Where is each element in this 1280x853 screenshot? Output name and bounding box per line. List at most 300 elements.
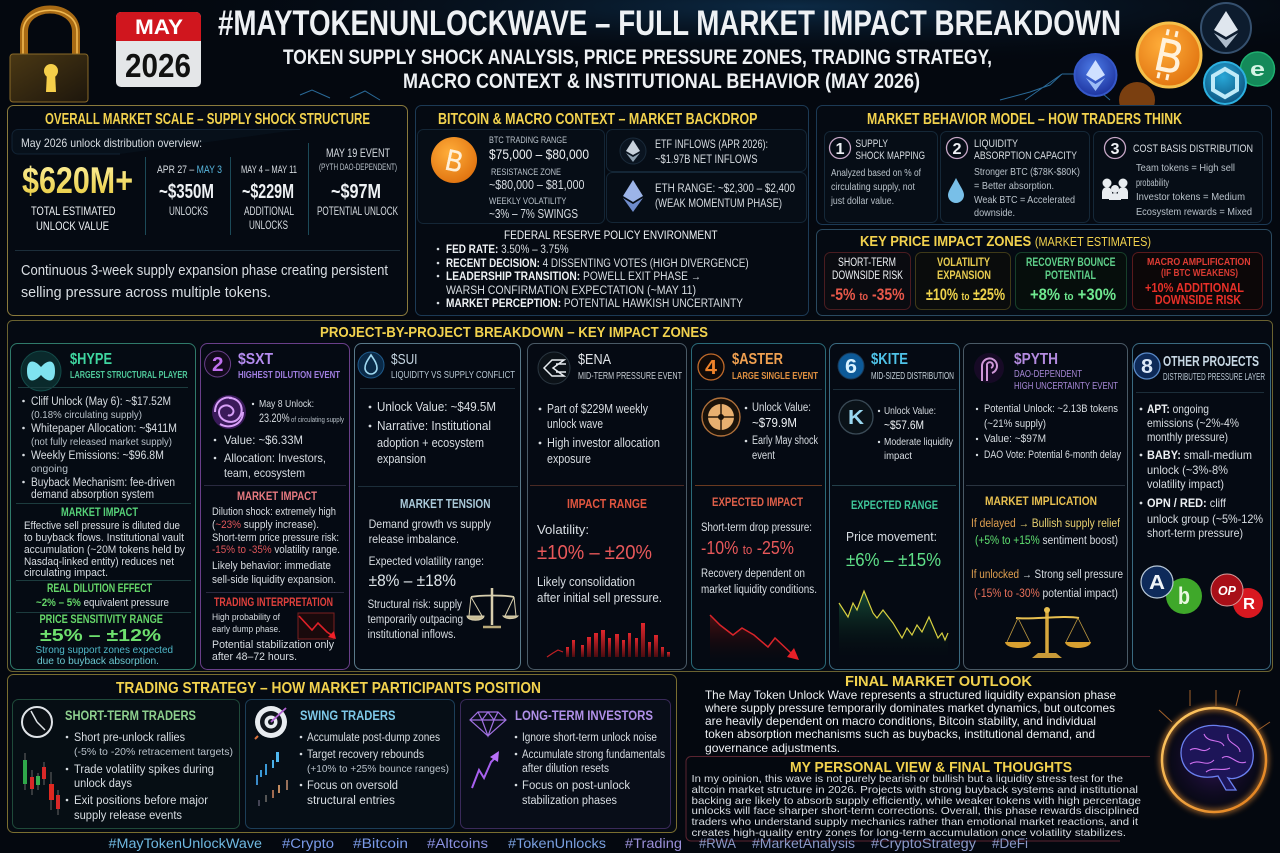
text: ASTER expected impact: EXPECTED IMPACT: [712, 495, 804, 509]
text: federal reserve policy: FEDERAL RESERVE POLICY ENVIRONMENT: [504, 228, 718, 242]
card: liquidity absorption capacity: Stronger BTC ($78K-$80K): [974, 166, 1080, 178]
heading: ENA: $ENA: [578, 351, 611, 368]
text: outlook paragraph: token absorption mechanisms such as buybacks, institutional demand, and: [705, 727, 1095, 741]
card: SUI: [354, 344, 520, 670]
text: SXT market impact: MARKET IMPACT: [237, 489, 318, 503]
text: swing bullet list: (+10% to +25% bounce ranges): [307, 763, 449, 775]
text: short-term bullet list: Trade volatility spikes during: [74, 764, 214, 776]
stat: Apr 27 to May 3: [157, 164, 222, 218]
text: SUI key points: adoption + ecosystem: [377, 435, 484, 450]
card: liquidity absorption capacity: 2: [952, 141, 962, 158]
card: SXT: [200, 344, 350, 670]
hashtags: #RWA: [699, 836, 736, 851]
heading: SXT: $SXT: [238, 351, 273, 368]
text: ASTER key points: event: [752, 450, 776, 462]
text: HYPE key points: Whitepaper Allocation: ~$411M: [31, 423, 177, 435]
zone: macro amplification: MACRO AMPLIFICATION: [1147, 256, 1251, 268]
sub-panel: BTC levels: [418, 130, 604, 224]
text: SXT key points: team, ecosystem: [224, 466, 305, 480]
text: other projects list: BABY: small-medium: [1147, 448, 1252, 462]
text: ASTER key points: [745, 402, 818, 462]
text: SUI market tension: MARKET TENSION: [400, 497, 490, 511]
chart: ENA red volume bars: [547, 623, 670, 657]
text: HYPE key points: Weekly Emissions: ~$96.8M: [31, 450, 164, 462]
card: liquidity absorption capacity: [940, 132, 1090, 222]
text: short-term bullet list: unlock days: [74, 778, 132, 790]
text: ASTER expected impact: -10% to -25%: [701, 538, 794, 558]
card: short-term traders: [12, 700, 240, 828]
zone: short-term downside risk: [824, 252, 910, 310]
heading: my personal view: MY PERSONAL VIEW & FINAL THOUGHTS: [790, 759, 1072, 776]
icon: target: [255, 706, 287, 739]
zone: recovery bounce potential: POTENTIAL: [1045, 270, 1096, 282]
heading: KITE: $KITE: [871, 351, 908, 368]
text: personal view paragraph: creates high-quality entry zones for long-term accumulation once volatility stabilizes.: [692, 827, 1126, 839]
text: PYTH market implication: If delayed → Bullish supply relief: [971, 518, 1121, 530]
text: HYPE key points: (0.18% circulating supply): [31, 409, 142, 421]
card: KITE: [830, 344, 960, 670]
heading: ASTER: LARGE SINGLE EVENT: [732, 370, 818, 382]
text: SXT market impact: sell-side liquidity expansion.: [212, 574, 336, 586]
sub-panel: ETH range: [606, 172, 806, 222]
text: federal reserve policy: WARSH CONFIRMATION EXPECTATION (~MAY 11): [446, 285, 696, 297]
card: supply shock mapping: 1: [836, 141, 845, 158]
text: KITE key points: ~$57.6M: [884, 418, 924, 432]
text: ENA impact range: Likely consolidation: [537, 575, 635, 589]
card: supply shock mapping: just dollar value.: [830, 195, 894, 207]
card: liquidity absorption capacity: LIQUIDITY: [974, 138, 1019, 150]
text: SUI market tension: Demand growth vs supply: [369, 517, 491, 531]
sub-panel: ETH range: ETH RANGE: ~$2,300 – $2,400: [655, 181, 795, 195]
heading: swing traders: SWING TRADERS: [300, 708, 396, 723]
icon: clock: [22, 707, 52, 737]
text: HYPE price sensitivity range: [36, 614, 173, 667]
text: supply expansion summary: selling pressure across multiple tokens.: [21, 285, 271, 301]
text: other projects list: volatility impact): [1147, 477, 1224, 491]
text: HYPE market impact: Effective sell pressure is diluted due: [24, 520, 180, 532]
stat: May 4 to May 11: UNLOCKS: [249, 220, 288, 232]
hashtags: #CryptoStrategy: [871, 836, 976, 851]
text: supply expansion summary: [21, 263, 388, 301]
icon: number 4: 4: [705, 357, 718, 379]
subtitle: TOKEN SUPPLY SHOCK ANALYSIS, PRICE PRESSURE ZONES, TRADING STRATEGY,: [283, 46, 992, 69]
heading: KITE: [871, 351, 954, 382]
heading: SXT: HIGHEST DILUTION EVENT: [238, 370, 340, 381]
card: cost basis distribution: [1094, 132, 1262, 222]
icon: number 2: [205, 351, 231, 377]
icon: calendar May 2026: [116, 12, 201, 87]
panel: bitcoin and macro context: [416, 106, 808, 316]
text: PYTH key points: DAO Vote: Potential 6-month delay: [984, 449, 1121, 461]
heading: PYTH: [1014, 351, 1118, 392]
card: liquidity absorption capacity: ABSORPTION CAPACITY: [974, 150, 1078, 162]
icon: number 2: 2: [212, 354, 224, 376]
sub-panel: BTC levels: B: [442, 144, 466, 179]
text: SXT key points: Value: ~$6.33M: [224, 433, 303, 447]
text: SXT trading interpretation: after 48–72 hours.: [212, 651, 297, 663]
text: long-term bullet list: Focus on post-unlock: [522, 780, 630, 792]
card: liquidity absorption capacity: Weak BTC = Accelerated: [974, 194, 1075, 206]
card: liquidity absorption capacity: downside.: [974, 207, 1015, 219]
text: SXT trading interpretation: High probability of: [212, 612, 280, 623]
text: ENA key points: High investor allocation: [547, 436, 660, 450]
sub-panel: ETH range: (WEAK MOMENTUM PHASE): [655, 196, 782, 210]
text: PYTH market implication: MARKET IMPLICATION: [985, 494, 1097, 508]
card: HYPE: [10, 344, 196, 670]
text: HYPE market impact: to buyback flows. Institutional vault: [24, 532, 184, 544]
icon: crypto coins cluster: [1074, 3, 1274, 118]
text: short-term bullet list: (-5% to -20% retracement targets): [74, 746, 233, 758]
sub-panel: BTC levels: $75,000 – $80,000: [489, 146, 589, 162]
text: ASTER key points: Unlock Value:: [752, 402, 811, 414]
stat: Apr 27 to May 3: ~$350M: [159, 181, 214, 203]
text: PYTH market implication: If unlocked → Strong sell pressure: [971, 569, 1123, 581]
text: ASTER expected impact: Short-term drop pressure:: [701, 522, 812, 534]
zone: short-term downside risk: -5% to -35%: [831, 286, 905, 304]
sub-panel: BTC levels: ~3% – 7% SWINGS: [489, 206, 578, 221]
heading: PYTH: $PYTH: [1014, 351, 1058, 368]
heading: KITE: MID-SIZED DISTRIBUTION: [871, 371, 954, 382]
text: HYPE key points: demand absorption system: [31, 489, 154, 501]
subtitle: [283, 46, 992, 93]
text: outlook paragraph: where supply pressure temporarily dominates market dynamics, but outcomes: [704, 701, 1115, 715]
text: KITE key points: Moderate liquidity: [884, 436, 954, 448]
text: short-term bullet list: Exit positions before major: [74, 795, 208, 807]
text: PYTH market implication: (+5% to +15% sentiment boost): [975, 535, 1118, 547]
text: HYPE price sensitivity range: due to buyback absorption.: [37, 655, 159, 667]
text: HYPE market impact: accumulation (~20M tokens held by: [24, 544, 185, 556]
icon: token logos: OP: [1218, 583, 1236, 598]
chart: SXT falling arrow: [298, 613, 336, 639]
text: SXT key points: 23.20%: [259, 411, 290, 425]
text: SXT key points: [214, 398, 344, 480]
icon: padlock: [10, 10, 88, 102]
text: KITE key points: impact: [884, 450, 912, 462]
text: SXT market impact: Short-term price pressure risk:: [212, 532, 339, 544]
stat: May 4 to May 11: ADDITIONAL: [244, 206, 294, 218]
panel: final market outlook: [704, 673, 1116, 755]
text: ASTER expected impact: [701, 495, 817, 596]
text: ENA impact range: IMPACT RANGE: [567, 497, 647, 511]
text: federal reserve policy: [437, 228, 749, 310]
icon: calendar May 2026: 2026: [125, 47, 191, 84]
heading: HYPE: [70, 351, 188, 381]
text: SXT trading interpretation: [212, 597, 334, 663]
stat: May 19 event: POTENTIAL UNLOCK: [317, 206, 398, 218]
card: supply shock mapping: SHOCK MAPPING: [856, 150, 925, 162]
text: swing bullet list: Accumulate post-dump zones: [307, 732, 440, 744]
hashtags: #Altcoins: [427, 836, 488, 851]
card: cost basis distribution: 3: [1110, 141, 1120, 158]
text: KITE expected range: Price movement:: [846, 529, 937, 544]
text: ASTER key points: Early May shock: [752, 435, 818, 447]
hashtags: #Trading: [625, 836, 682, 851]
text: SXT key points: of circulating supply: [291, 415, 344, 424]
text: short-term bullet list: [66, 732, 233, 822]
text: SUI market tension: [368, 497, 491, 641]
text: swing bullet list: [300, 732, 449, 807]
text: ENA key points: [539, 402, 660, 466]
text: HYPE market impact: Nasdaq-linked entity) reduces net: [24, 556, 174, 568]
text: ASTER key points: ~$79.9M: [752, 416, 797, 430]
text: SUI key points: Narrative: Institutional: [377, 418, 491, 433]
hashtags: #MayTokenUnlockWave: [108, 836, 262, 851]
text: ENA key points: unlock wave: [547, 417, 603, 431]
panel: overall market scale: [8, 106, 408, 316]
text: HYPE price sensitivity range: Strong support zones expected: [36, 644, 173, 656]
zone: macro amplification: (IF BTC WEAKENS): [1161, 267, 1238, 279]
text: ENA impact range: Volatility:: [537, 522, 589, 537]
text: SXT market impact: -15% to -35% volatility range.: [212, 544, 340, 556]
text: KITE key points: Unlock Value:: [884, 405, 936, 417]
icon: SUI drop: [358, 352, 384, 378]
text: PYTH key points: [976, 403, 1121, 461]
text: other projects list: monthly pressure): [1147, 430, 1228, 444]
text: PYTH key points: Potential Unlock: ~2.13B tokens: [984, 403, 1118, 415]
text: SUI market tension: temporarily outpacing: [368, 614, 463, 626]
heading: market behavior model: MARKET BEHAVIOR MODEL – HOW TRADERS THINK: [867, 111, 1183, 128]
text: KITE expected range: [846, 498, 941, 570]
stat: $620M+ total: [22, 160, 133, 233]
hashtags: #DeFi: [992, 836, 1028, 851]
heading: project-by-project breakdown: PROJECT-BY-PROJECT BREAKDOWN – KEY IMPACT ZONES: [320, 324, 708, 341]
text: ENA impact range: ±10% – ±20%: [537, 542, 652, 564]
heading: SUI: $SUI: [391, 351, 418, 368]
card: cost basis distribution: Ecosystem rewards = Mixed: [1136, 206, 1252, 218]
text: swing bullet list: Target recovery rebounds: [307, 749, 424, 761]
zone: recovery bounce potential: +8% to +30%: [1030, 286, 1116, 304]
zone: volatility expansion: ±10% to ±25%: [926, 286, 1005, 304]
text: swing bullet list: Focus on oversold: [307, 780, 398, 792]
heading: HYPE: $HYPE: [70, 351, 112, 368]
heading: overall market scale: OVERALL MARKET SCALE – SUPPLY SHOCK STRUCTURE: [45, 111, 370, 128]
text: SUI market tension: ±8% – ±18%: [369, 571, 456, 590]
icon: number 4: [698, 354, 724, 380]
text: other projects list: emissions (~2%-4%: [1147, 416, 1239, 430]
text: ENA impact range: after initial sell pressure.: [537, 591, 662, 605]
stat: May 19 event: [317, 148, 398, 218]
text: ASTER expected impact: Recovery dependent on: [701, 568, 805, 580]
text: KITE key points: [878, 405, 954, 462]
card: supply shock mapping: [824, 132, 938, 222]
chart: KITE price line: [839, 591, 948, 660]
text: long-term bullet list: [515, 732, 665, 807]
zone: macro amplification: [1132, 252, 1262, 310]
text: federal reserve policy: FED RATE: 3.50% – 3.75%: [446, 244, 569, 256]
card: supply shock mapping: SUPPLY: [856, 138, 889, 150]
text: HYPE market impact: MARKET IMPACT: [61, 507, 138, 519]
text: personal view paragraph: In my opinion, this wave is not purely bearish or bullish but a liquidity stress test for the: [692, 773, 1123, 785]
text: SUI market tension: Expected volatility range:: [369, 554, 484, 568]
panel: my personal view: [686, 756, 1150, 841]
text: PYTH market implication: [971, 494, 1123, 600]
text: SXT trading interpretation: early dump phase.: [212, 624, 280, 635]
subtitle: MACRO CONTEXT & INSTITUTIONAL BEHAVIOR (MAY 2026): [403, 70, 920, 93]
heading: ASTER: $ASTER: [732, 351, 783, 368]
text: long-term bullet list: after dilution resets: [522, 763, 609, 775]
text: HYPE key points: Cliff Unlock (May 6): ~$17.52M: [31, 396, 171, 408]
card: cost basis distribution: probability: [1136, 177, 1170, 189]
text: PYTH market implication: (-15% to -30% potential impact): [974, 588, 1118, 600]
text: PYTH key points: (~21% supply): [984, 418, 1046, 430]
sub-panel: BTC levels: RESISTANCE ZONE: [491, 167, 561, 178]
text: KITE expected range: ±6% – ±15%: [846, 550, 941, 570]
icon: crypto coins cluster: e: [1250, 59, 1265, 81]
icon: SXT swirl: [212, 395, 246, 429]
heading: SXT: [238, 351, 340, 381]
text: SXT market impact: [212, 489, 340, 586]
text: personal view paragraph: [692, 773, 1141, 839]
hashtags: #Crypto: [282, 836, 334, 851]
text: other projects list: unlock (~3%-8%: [1147, 463, 1228, 477]
text: KITE expected range: EXPECTED RANGE: [851, 498, 938, 512]
heading: ENA: [578, 351, 682, 382]
icon: KITE coin: K: [848, 407, 865, 429]
text: HYPE key points: (not fully released market supply): [31, 436, 172, 448]
text: SXT trading interpretation: TRADING INTERPRETATION: [214, 597, 333, 609]
heading: trading strategy: TRADING STRATEGY – HOW MARKET PARTICIPANTS POSITION: [116, 680, 541, 697]
card: long-term investors: [460, 700, 670, 828]
text: personal view paragraph: altcoin market structure in 2026. Projects with strong buyback systems and institutional: [692, 784, 1138, 796]
text: long-term bullet list: Accumulate strong fundamentals: [522, 749, 665, 761]
icon: glowing brain: [1148, 690, 1280, 826]
stat: Apr 27 to May 3: APR 27 – MAY 3: [157, 164, 222, 176]
text: federal reserve policy: RECENT DECISION: 4 DISSENTING VOTES (HIGH DIVERGENCE): [446, 258, 749, 270]
hashtags: #Bitcoin: [353, 836, 408, 851]
icon: gold scales: [1005, 607, 1091, 658]
text: distribution overview label: [12, 130, 300, 154]
zone: short-term downside risk: DOWNSIDE RISK: [832, 270, 903, 282]
text: ASTER expected impact: market liquidity conditions.: [701, 584, 817, 596]
text: SXT key points: May 8 Unlock:: [259, 398, 314, 410]
panel: trading strategy: [8, 674, 676, 832]
stat: $620M+ total: UNLOCK VALUE: [36, 219, 109, 233]
text: SUI market tension: release imbalance.: [369, 532, 459, 546]
card: supply shock mapping: Analyzed based on % of: [831, 167, 921, 179]
text: long-term bullet list: stabilization phases: [522, 795, 617, 807]
icon: scales: [467, 588, 518, 627]
zone: recovery bounce potential: [1016, 252, 1126, 310]
card: cost basis distribution: Investor tokens = Medium: [1136, 191, 1245, 203]
text: HYPE price sensitivity range: ±5% – ±12%: [40, 625, 162, 645]
text: long-term bullet list: Ignore short-term unlock noise: [522, 732, 657, 744]
card: supply shock mapping: circulating supply, not: [831, 181, 915, 193]
heading: PYTH: HIGH UNCERTAINTY EVENT: [1014, 381, 1118, 392]
panel: key price impact zones: [816, 230, 1272, 316]
text: personal view paragraph: unlocks will face sharper short-term corrections. Overall, this phase rewards disciplined: [692, 805, 1139, 817]
text: SUI market tension: institutional inflows.: [368, 629, 456, 641]
stat: Apr 27 to May 3: UNLOCKS: [169, 206, 208, 218]
zone: short-term downside risk: SHORT-TERM: [838, 257, 896, 269]
text: SXT market impact: (~23% supply increase).: [212, 519, 319, 531]
text: short-term bullet list: supply release events: [74, 810, 182, 822]
icon: ASTER coin: [702, 398, 740, 436]
icon: crypto coins cluster: B: [1151, 27, 1188, 84]
heading: final market outlook: FINAL MARKET OUTLOOK: [845, 673, 1032, 690]
text: HYPE key points: [22, 396, 177, 501]
zone: volatility expansion: VOLATILITY: [937, 257, 990, 269]
text: personal view paragraph: traders who understand supply mechanics rather than emotional market reactions, and it: [692, 816, 1138, 828]
text: federal reserve policy: MARKET PERCEPTION: POTENTIAL HAWKISH UNCERTAINTY: [446, 298, 743, 310]
icon: calendar May 2026: MAY: [135, 16, 183, 39]
text: outlook paragraph: The May Token Unlock Wave represents a structured liquidity expansion phase: [705, 688, 1116, 702]
card: cost basis distribution: COST BASIS DISTRIBUTION: [1133, 143, 1253, 155]
text: swing bullet list: structural entries: [307, 795, 395, 807]
icon: number 6: [838, 353, 864, 379]
heading: PYTH: DAO-DEPENDENT: [1014, 369, 1082, 380]
text: HYPE market impact: [24, 507, 185, 579]
stat: May 4 to May 11: [241, 164, 297, 232]
text: personal view paragraph: backing are likely to absorb supply efficiently, while weaker tokens with high percentage: [692, 795, 1141, 807]
heading: HYPE: LARGEST STRUCTURAL PLAYER: [70, 370, 188, 381]
sub-panel: BTC levels: ~$80,000 – $81,000: [489, 177, 584, 192]
text: PYTH key points: Value: ~$97M: [984, 433, 1046, 445]
text: outlook paragraph: are heavily dependent on macro conditions, Bitcoin stability, and individual: [705, 714, 1096, 728]
heading: key price impact zones: KEY PRICE IMPACT ZONES (MARKET ESTIMATES): [860, 233, 1151, 250]
text: HYPE real dilution effect: [36, 583, 169, 609]
text: other projects list: unlock group (~5%-12%: [1147, 512, 1263, 526]
zone: recovery bounce potential: RECOVERY BOUNCE: [1026, 257, 1116, 269]
text: SXT market impact: Dilution shock: extremely high: [212, 506, 336, 518]
text: other projects list: OPN / RED: cliff: [1147, 496, 1227, 510]
text: other projects list: [1140, 402, 1263, 540]
heading: long-term investors: LONG-TERM INVESTORS: [515, 708, 653, 723]
heading: other projects: [1163, 354, 1265, 383]
stat: $620M+ total: TOTAL ESTIMATED: [31, 204, 116, 218]
stat: May 4 to May 11: ~$229M: [242, 181, 294, 203]
sub-panel: ETF inflows: [606, 130, 806, 172]
card: ASTER: [692, 344, 826, 670]
hashtags: [108, 836, 1028, 851]
icon: token logos: [1141, 566, 1263, 618]
icon: PYTH logo: [974, 353, 1004, 383]
hashtags: #TokenUnlocks: [508, 836, 606, 851]
text: ENA impact range: [537, 497, 662, 605]
sub-panel: ETF inflows: ~$1.97B NET INFLOWS: [655, 152, 758, 166]
text: SUI key points: Unlock Value: ~$49.5M: [377, 399, 496, 414]
card: PYTH: [964, 344, 1128, 670]
icon: number 6: 6: [845, 356, 857, 378]
icon: token logos: b: [1178, 583, 1190, 610]
heading: SUI: LIQUIDITY VS SUPPLY CONFLICT: [391, 370, 515, 381]
text: federal reserve policy: LEADERSHIP TRANSITION: POWELL EXIT PHASE →: [446, 271, 701, 283]
text: other projects list: short-term pressure): [1147, 526, 1243, 540]
zone: macro amplification: DOWNSIDE RISK: [1155, 292, 1241, 307]
text: outlook paragraph: [704, 688, 1116, 755]
icon: diamond: [470, 712, 506, 736]
zone: volatility expansion: EXPANSION: [937, 270, 991, 282]
icon: rising arrow: [472, 751, 499, 788]
card: swing traders: [246, 700, 454, 828]
sub-panel: BTC levels: BTC TRADING RANGE: [489, 135, 567, 146]
chart: swing candles: [256, 752, 288, 806]
card: cost basis distribution: Team tokens = High sell: [1136, 162, 1235, 174]
text: SUI market tension: Structural risk: supply: [368, 599, 462, 611]
card: ENA: [528, 344, 686, 670]
heading: bitcoin and macro: BITCOIN & MACRO CONTEXT – MARKET BACKDROP: [438, 111, 758, 128]
stat: $620M+ total: $620M+: [22, 160, 133, 201]
sub-panel: ETF inflows: ETF INFLOWS (APR 2026):: [655, 137, 768, 151]
chart: ASTER falling price: [710, 615, 799, 664]
text: outlook paragraph: governance adjustments.: [705, 741, 840, 755]
card: liquidity absorption capacity: = Better absorption.: [974, 180, 1054, 192]
stat: May 19 event: ~$97M: [331, 181, 381, 203]
text: ENA key points: exposure: [547, 452, 591, 466]
text: SXT market impact: Likely behavior: immediate: [212, 560, 331, 572]
icon: HYPE logo: [21, 351, 61, 391]
text: SUI key points: expansion: [377, 451, 426, 466]
zone: macro amplification: +10% ADDITIONAL: [1145, 280, 1244, 295]
